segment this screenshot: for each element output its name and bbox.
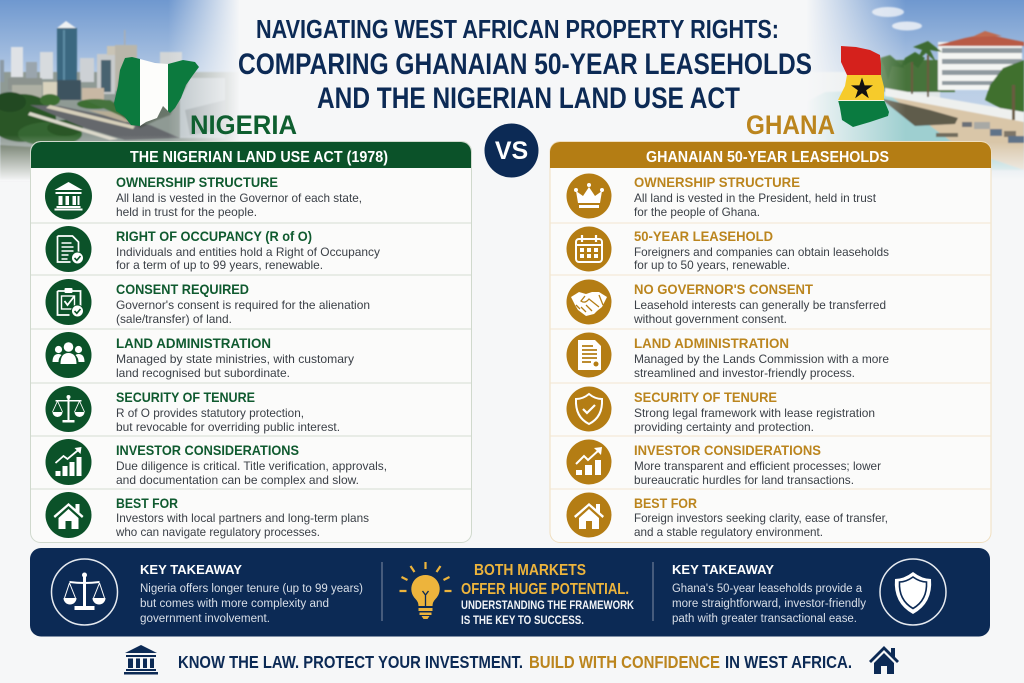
row: security of tenure: Strong legal framework with lease registration <box>634 406 875 420</box>
row: right of occupancy: Individuals and entities hold a Right of Occupancy <box>116 245 380 259</box>
row: land administration: LAND ADMINISTRATION <box>634 335 789 351</box>
row: security of tenure: SECURITY OF TENURE <box>634 389 777 405</box>
center message <box>461 562 635 627</box>
icon: clipboard with check <box>46 279 92 325</box>
icon: document <box>566 332 612 378</box>
row: land administration: LAND ADMINISTRATION <box>116 335 271 351</box>
row: land administration: land recognised but subordinate. <box>116 366 290 380</box>
title <box>238 14 812 115</box>
takeaway: Nigeria: but comes with more complexity and <box>140 598 329 610</box>
footer tagline: KNOW THE LAW. PROTECT YOUR INVESTMENT. <box>178 652 523 672</box>
takeaway: Ghana: KEY TAKEAWAY <box>672 562 774 577</box>
row: no governor's consent: Leasehold interests can generally be transferred <box>634 298 886 312</box>
center message: UNDERSTANDING THE FRAMEWORK <box>461 600 635 612</box>
icon: crown <box>566 174 612 218</box>
row: right of occupancy: for a term of up to 99 years, renewable. <box>116 258 323 272</box>
icon: shield with check <box>566 386 612 432</box>
center message: OFFER HUGE POTENTIAL. <box>461 581 629 598</box>
row: no governor's consent: NO GOVERNOR'S CONSENT <box>634 281 813 297</box>
row: investor considerations <box>46 439 387 487</box>
row: ownership structure <box>45 172 362 220</box>
row: ownership structure: for the people of Ghana. <box>634 205 760 219</box>
icon: house <box>46 492 92 538</box>
title: COMPARING GHANAIAN 50-YEAR LEASEHOLDS <box>238 48 812 81</box>
panel header: Nigeria <box>31 142 471 168</box>
row: best for: BEST FOR <box>116 495 178 511</box>
row: right of occupancy: RIGHT OF OCCUPANCY (R of O) <box>116 228 312 244</box>
VS badge: VS <box>495 137 528 165</box>
row: land administration: Managed by state ministries, with customary <box>116 352 354 366</box>
row: land administration: Managed by the Lands Commission with a more <box>634 352 889 366</box>
row: best for: and a stable regulatory environment. <box>634 525 823 539</box>
center message: BOTH MARKETS <box>474 562 586 579</box>
heading: Ghana: GHANA <box>746 110 835 140</box>
row: ownership structure: All land is vested in the Governor of each state, <box>116 191 362 205</box>
row: ownership structure: All land is vested in the President, held in trust <box>634 191 877 205</box>
row: best for: BEST FOR <box>634 495 697 511</box>
icon: light bulb <box>400 562 452 619</box>
row: no governor's consent: without government consent. <box>633 312 787 326</box>
row: 50-year leasehold: for up to 50 years, renewable. <box>634 258 790 272</box>
takeaway: Nigeria: Nigeria offers longer tenure (up to 99 years) <box>140 583 363 595</box>
footer tagline <box>124 645 899 674</box>
panel: Nigerian Land Use Act <box>30 142 472 542</box>
row: land administration <box>566 332 889 380</box>
panel header: Ghana <box>550 142 991 168</box>
icon: house <box>566 492 612 538</box>
row: security of tenure <box>566 386 875 434</box>
VS badge <box>484 124 538 178</box>
row: security of tenure <box>46 386 340 434</box>
row: investor considerations: INVESTOR CONSIDERATIONS <box>116 442 299 458</box>
panel: Ghanaian 50-year leaseholds <box>550 142 991 542</box>
title: NAVIGATING WEST AFRICAN PROPERTY RIGHTS: <box>256 14 779 44</box>
icon: growth chart <box>566 440 612 484</box>
banner: key takeaways <box>30 548 990 636</box>
icon: people <box>46 332 92 378</box>
row: 50-year leasehold: 50-YEAR LEASEHOLD <box>634 228 773 244</box>
Ghana flag map <box>838 46 889 127</box>
row: ownership structure <box>566 174 877 219</box>
row: 50-year leasehold: Foreigners and companies can obtain leaseholds <box>634 245 889 259</box>
row: best for <box>566 492 888 539</box>
row: 50-year leasehold <box>566 226 889 272</box>
row: investor considerations: More transparent and efficient processes; lower <box>634 459 881 473</box>
takeaway: Ghana: Ghana's 50-year leaseholds provide a <box>672 583 863 595</box>
footer tagline: BUILD WITH CONFIDENCE <box>529 652 720 672</box>
takeaway: Nigeria: KEY TAKEAWAY <box>140 562 242 577</box>
icon: handshake <box>566 280 612 324</box>
row: investor considerations: and documentation can be complex and slow. <box>116 473 359 487</box>
icon: bank <box>45 172 92 220</box>
takeaway: Ghana: path with greater transactional ease. <box>672 613 857 625</box>
takeaway: Ghana: more straightforward, investor-friendly <box>672 598 866 610</box>
heading: Nigeria: NIGERIA <box>190 110 297 140</box>
takeaway: Nigeria: government involvement. <box>140 613 270 625</box>
row: best for <box>46 492 369 539</box>
panel header: Ghana: GHANAIAN 50-YEAR LEASEHOLDS <box>646 149 889 166</box>
row: land administration: streamlined and investor-friendly process. <box>634 366 855 380</box>
icon: scales <box>46 386 92 432</box>
row: consent required: Governor's consent is required for the alienation <box>116 298 370 312</box>
icon: bank <box>124 645 158 674</box>
icon: growth chart <box>46 439 92 485</box>
row: investor considerations: Due diligence is critical. Title verification, approvals, <box>116 459 387 473</box>
panel header: Nigeria: THE NIGERIAN LAND USE ACT (1978) <box>130 149 388 166</box>
row: investor considerations <box>566 440 881 487</box>
row: security of tenure: providing certainty and protection. <box>634 420 814 434</box>
Nigeria flag map <box>114 57 199 128</box>
image: Nigerian city skyline <box>0 0 253 182</box>
row: ownership structure: OWNERSHIP STRUCTURE <box>634 174 800 190</box>
row: consent required: CONSENT REQUIRED <box>116 281 249 297</box>
row: ownership structure: OWNERSHIP STRUCTURE <box>116 174 278 190</box>
icon: shield in circle <box>880 559 946 625</box>
title: AND THE NIGERIAN LAND USE ACT <box>317 82 740 115</box>
center message: IS THE KEY TO SUCCESS. <box>461 615 584 627</box>
row: security of tenure: SECURITY OF TENURE <box>116 389 255 405</box>
row: best for: Investors with local partners and long-term plans <box>116 511 369 525</box>
row: best for: Foreign investors seeking clarity, ease of transfer, <box>634 511 888 525</box>
row: security of tenure: R of O provides statutory protection, <box>116 406 304 420</box>
row: best for: who can navigate regulatory processes. <box>115 525 320 539</box>
row: land administration <box>46 332 354 380</box>
row: ownership structure: held in trust for the people. <box>116 205 257 219</box>
icon: scales in circle <box>52 559 118 625</box>
row: consent required: (sale/transfer) of land. <box>116 312 232 326</box>
icon: document with check <box>46 226 92 272</box>
takeaway: Nigeria <box>52 559 363 625</box>
row: no governor's consent <box>566 280 886 326</box>
takeaway: Ghana <box>672 559 946 625</box>
footer tagline: IN WEST AFRICA. <box>725 652 852 672</box>
icon: house <box>869 646 899 674</box>
row: security of tenure: but revocable for overriding public interest. <box>116 420 340 434</box>
row: consent required <box>46 279 370 326</box>
image: Ghanaian coastal hotel scene <box>796 0 1024 182</box>
icon: calendar <box>566 226 612 272</box>
row: investor considerations: bureaucratic hurdles for land transactions. <box>634 473 854 487</box>
row: investor considerations: INVESTOR CONSIDERATIONS <box>634 442 821 458</box>
row: right of occupancy <box>46 226 380 272</box>
